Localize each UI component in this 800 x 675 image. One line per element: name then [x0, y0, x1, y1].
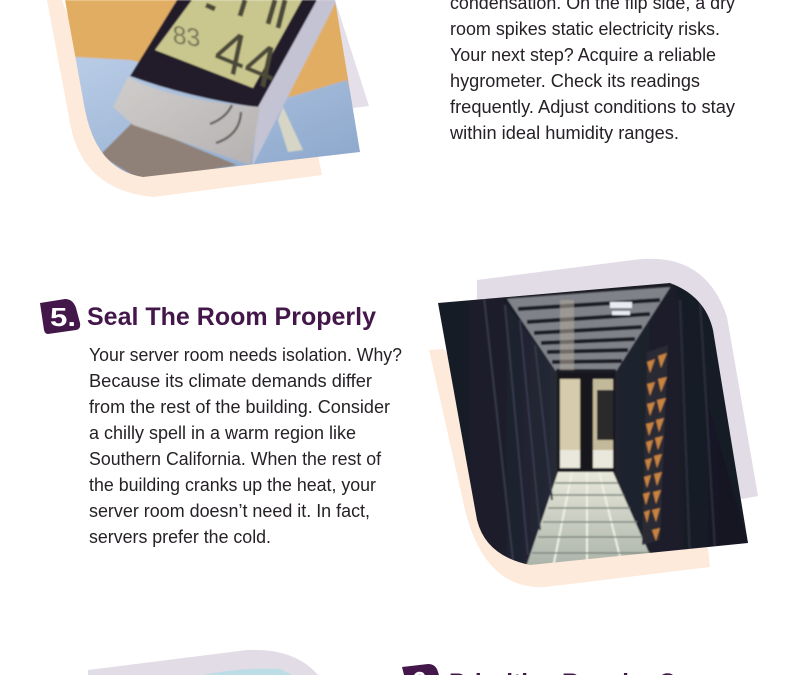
section 5: body text	[89, 345, 402, 547]
section 5: body text: Southern California. When the rest of	[89, 449, 382, 469]
number badge 5	[40, 299, 80, 334]
section 4: body text: hygrometer. Check its readings	[450, 71, 700, 91]
lavender backing shape	[477, 259, 758, 499]
peach backing shape	[47, 0, 322, 197]
section 4: body text: room spikes static electricity risks.	[450, 19, 720, 39]
lavender backing shape	[320, 0, 369, 108]
section 5: body text: from the rest of the building. Consider	[89, 397, 390, 417]
lavender backing shape	[88, 650, 318, 675]
heading text	[449, 669, 712, 675]
section 5: server room photo group	[429, 259, 760, 587]
end door	[557, 373, 615, 473]
section 5: body text: servers prefer the cold.	[89, 527, 271, 547]
section 5: body text: Because its climate demands differ	[89, 371, 372, 391]
photo: server aisle	[438, 283, 748, 565]
peach backing shape	[429, 349, 710, 587]
heading text: Seal The Room Properly	[87, 303, 376, 331]
section 4: body text: within ideal humidity ranges.	[449, 123, 679, 143]
photo: hygrometer: 83	[172, 21, 201, 53]
section 5: heading	[40, 299, 376, 334]
orange panel pattern	[642, 345, 668, 545]
section 6: photo group (cropped)	[88, 650, 318, 675]
number badge 5: 5.	[50, 302, 76, 332]
hygrometer display digits: 44	[209, 15, 283, 103]
number badge 6	[402, 664, 439, 675]
section 4: body text: Your next step? Acquire a reliable	[450, 45, 716, 65]
section 5: body text: server room doesn’t need it. In fact,	[89, 501, 370, 521]
section 5: body text: the building cranks up the heat, your	[89, 475, 376, 495]
section 5: body text: a chilly spell in a warm region like	[89, 423, 356, 443]
photo: hygrometer	[65, 0, 360, 177]
photo: light blue top edge	[203, 669, 292, 675]
ceiling	[505, 283, 673, 373]
section 6: heading (cropped)	[402, 664, 712, 675]
section 4: humidity photo group	[40, 0, 375, 197]
section 4: body text	[449, 0, 735, 143]
rack panel lines	[484, 297, 552, 560]
raised floor	[525, 472, 650, 570]
section 4: body text: frequently. Adjust conditions to stay	[450, 97, 735, 117]
section 5: body text: Your server room needs isolation. Why?	[89, 345, 402, 365]
